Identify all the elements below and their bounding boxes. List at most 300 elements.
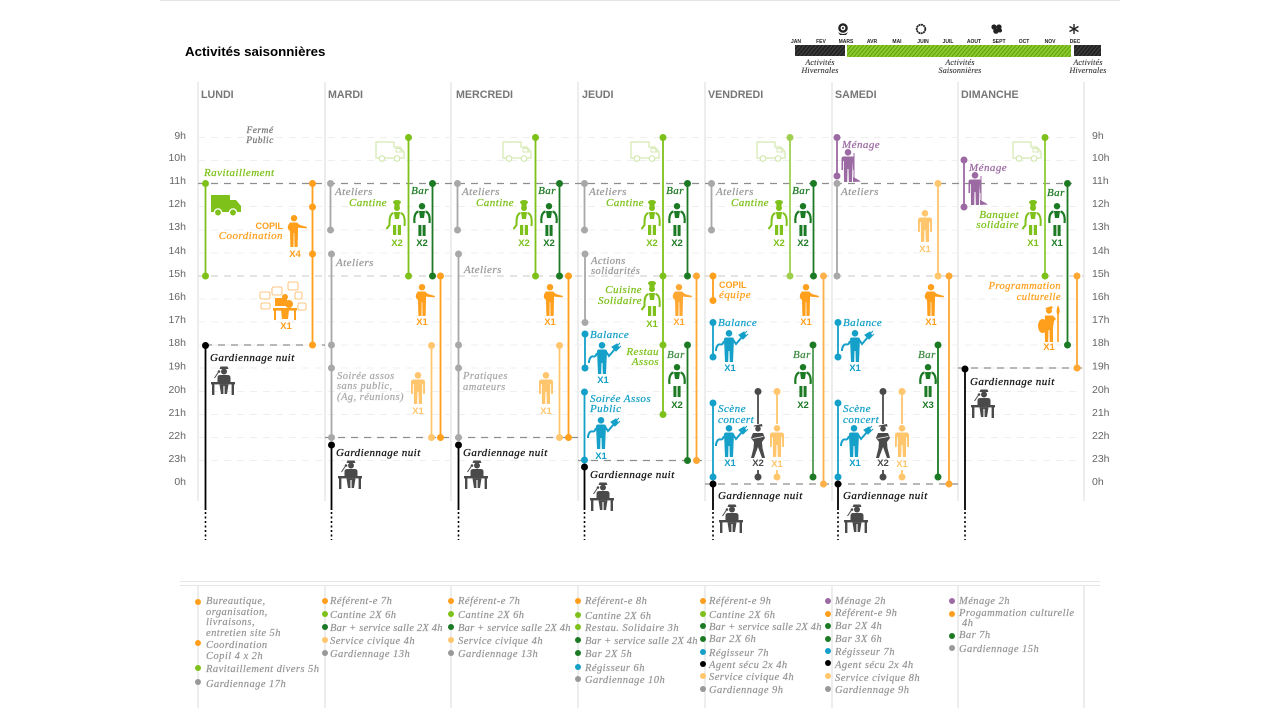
bar: service civique — [774, 388, 780, 480]
label: Bar — [667, 349, 685, 361]
label: copil: COPIL — [255, 221, 283, 231]
count: X2 — [752, 458, 764, 469]
month labels: DEC — [1070, 39, 1081, 45]
count: X2 — [671, 238, 683, 249]
hour labels right: 17h — [1092, 314, 1110, 326]
count: X1 — [849, 363, 862, 374]
label: culturelle — [1017, 292, 1061, 303]
hour labels left: 10h — [168, 152, 186, 164]
page frame line — [160, 0, 1120, 1]
bar: programmation — [1074, 273, 1080, 371]
count: X1 — [771, 459, 784, 470]
label: Cantine — [349, 197, 387, 209]
label: Ménage — [968, 162, 1007, 174]
icon: bar staff — [414, 203, 430, 236]
legend: dimanche — [949, 596, 1074, 655]
label: Ateliers — [463, 264, 502, 276]
bar: ateliers — [328, 180, 334, 233]
legend: vendredi — [700, 596, 822, 696]
icon: person pointing — [800, 284, 819, 316]
label: Balance — [843, 317, 882, 329]
label: solidaire — [976, 219, 1019, 231]
icon: civic service — [411, 372, 425, 404]
bar: ravitaillement — [202, 180, 208, 279]
label: Bar — [792, 185, 810, 197]
hour labels left: 22h — [168, 430, 186, 442]
legend: lundi: Gardiennage 17h — [206, 679, 286, 690]
hour labels right: 12h — [1092, 198, 1110, 210]
icon: technician — [588, 417, 620, 449]
bar: bar — [1064, 180, 1070, 348]
icon: bar staff — [920, 364, 936, 397]
count: X1 — [673, 317, 686, 328]
legend: jeudi: Restau. Solidaire 3h — [584, 623, 679, 634]
bar: ateliers — [834, 180, 840, 279]
label: winter 2: Hivernales — [1068, 66, 1107, 75]
icon: cleaner — [968, 172, 988, 205]
label: Cantine — [606, 197, 644, 209]
hour labels left: 17h — [168, 314, 186, 326]
legend: dimanche: Gardiennage 15h — [959, 644, 1039, 655]
label: Bar — [411, 185, 429, 197]
panel: samedi — [834, 134, 952, 540]
label: Bar — [1047, 187, 1065, 199]
legend: mercredi: Bar + service salle 2X 4h — [458, 623, 571, 634]
bar: gardiennage — [202, 342, 208, 540]
legend: samedi: Bar 2X 4h — [835, 621, 882, 632]
count: X1 — [544, 317, 557, 328]
legend: samedi — [825, 596, 920, 696]
label: Gardiennage nuit — [463, 447, 548, 459]
icon: cook — [1022, 200, 1041, 235]
label: winter: Activités — [804, 58, 835, 67]
icon: bar staff — [1049, 203, 1065, 236]
icon: guard at desk — [464, 460, 488, 489]
hour labels left: 19h — [168, 360, 186, 372]
label: season: Saisonnières — [938, 66, 982, 75]
bar: cantine — [787, 134, 793, 279]
bar: gardiennage — [835, 481, 841, 540]
label: Gardiennage nuit — [336, 447, 421, 459]
month labels: OCT — [1019, 39, 1029, 45]
hour labels right: 15h — [1092, 268, 1110, 280]
label: season: Activités — [944, 58, 975, 67]
legend: lundi: Bureautique, — [206, 596, 266, 607]
bar: sécurité — [755, 388, 761, 480]
legend: vendredi: Service civique 4h — [709, 672, 794, 683]
bar: ateliers — [708, 180, 714, 233]
icon: cook — [768, 200, 787, 235]
icon: cleaner — [842, 149, 861, 182]
legend: samedi: Ménage 2h — [834, 596, 886, 607]
bar: copil — [710, 273, 716, 304]
hour labels left: 0h — [174, 476, 186, 488]
hour labels right: 23h — [1092, 453, 1110, 465]
bar: balance — [710, 320, 716, 360]
count: X2 — [646, 238, 658, 249]
hour labels right: 18h — [1092, 337, 1110, 349]
label: coordination: Coordination — [219, 230, 283, 242]
label: Soirée Assos — [590, 393, 651, 405]
label: Ateliers — [334, 186, 373, 198]
legend: samedi: Régisseur 7h — [834, 647, 895, 658]
bar: balance — [835, 320, 841, 360]
icon: security agent — [876, 424, 890, 458]
hour labels left: 15h — [168, 268, 186, 280]
bar: bar 2 — [684, 342, 690, 464]
legend: vendredi: Gardiennage 9h — [709, 685, 783, 696]
count: X1 — [416, 317, 429, 328]
icon: technician — [589, 342, 621, 374]
count: X1 — [597, 375, 610, 386]
count: X1 — [412, 406, 425, 417]
bar: bar 2 — [810, 342, 816, 480]
bar: scène — [710, 400, 716, 480]
label: Actions — [590, 256, 626, 267]
label: Ateliers — [840, 186, 879, 198]
icon: technician — [842, 330, 874, 362]
label: copil: COPIL — [719, 280, 747, 290]
icon: guard at desk — [719, 504, 743, 533]
label: amateurs — [463, 382, 506, 393]
bar: référent — [438, 273, 444, 440]
hour labels left: 16h — [168, 291, 186, 303]
hour labels left: 14h — [168, 245, 186, 257]
legend: vendredi: Bar + service salle 2X 4h — [709, 622, 822, 633]
icon: faded truck — [1013, 142, 1041, 161]
legend: jeudi — [575, 596, 698, 686]
count: X3 — [922, 400, 934, 411]
legend: mardi: Bar + service salle 2X 4h — [330, 623, 443, 634]
bar: gardiennage — [710, 481, 716, 540]
bar: ménage — [834, 134, 840, 179]
label: Cantine — [476, 197, 514, 209]
icon: person pointing — [925, 284, 944, 316]
label: Gardiennage nuit — [970, 376, 1055, 388]
count: X1 — [1051, 238, 1064, 249]
bar: bar — [430, 180, 436, 279]
panel: mercredi — [454, 134, 572, 540]
count: X1 — [919, 244, 932, 255]
count: X1 — [724, 458, 737, 469]
month labels: JUIN — [917, 39, 929, 45]
hour labels right: 20h — [1092, 384, 1110, 396]
label: ravitaillement: Ravitaillement — [203, 167, 275, 179]
icon: guard at desk — [844, 504, 868, 533]
count: X1 — [896, 459, 909, 470]
season bar — [847, 45, 1071, 57]
count: X1 — [849, 458, 862, 469]
month labels — [791, 39, 1081, 45]
bar: ateliers — [454, 180, 460, 233]
legend: vendredi: Agent sécu 2x 4h — [708, 660, 788, 671]
day headings: VENDREDI — [708, 89, 763, 101]
label: gardiennage: Gardiennage nuit — [210, 352, 295, 364]
label: Bar — [538, 185, 556, 197]
hour labels right: 11h — [1092, 175, 1109, 187]
day headings — [201, 89, 1019, 101]
bar: référent — [820, 273, 826, 487]
bar: service civique — [935, 180, 941, 279]
label: soirée: sans public, — [337, 381, 393, 392]
label: Assos — [631, 356, 659, 368]
label: Bar — [918, 349, 936, 361]
legend divider — [180, 581, 1100, 586]
label: Ateliers — [335, 257, 374, 269]
icon: cook — [386, 200, 405, 235]
count: X1 — [724, 363, 737, 374]
legend: dimanche: Ménage 2h — [958, 596, 1010, 607]
legend: mercredi — [448, 596, 571, 660]
bar: gardiennage — [962, 366, 968, 540]
label: équipe: équipe — [719, 289, 751, 301]
label: Scène — [843, 403, 871, 415]
count: X2 — [797, 400, 809, 411]
legend: jeudi: Bar 2X 5h — [585, 649, 632, 660]
count: X1 — [1043, 342, 1056, 353]
hour labels right: 21h — [1092, 407, 1110, 419]
hour labels right: 9h — [1092, 130, 1104, 142]
label: Bar — [793, 349, 811, 361]
legend: lundi: Copil 4 x 2h — [206, 651, 263, 662]
label: soirée: (Ag, réunions) — [337, 392, 404, 403]
label: Pratiques — [462, 371, 508, 382]
count: X4 — [289, 249, 302, 260]
legend: mardi: Service civique 4h — [330, 636, 415, 647]
label: Restau — [625, 346, 659, 358]
hour labels left: 12h — [168, 198, 186, 210]
icon: faded truck — [757, 142, 785, 161]
legend: lundi: entretien site 5h — [206, 628, 281, 639]
icon: faded truck — [503, 142, 531, 161]
label: Ateliers — [715, 186, 754, 198]
month labels: AVR — [867, 39, 877, 45]
legend: dimanche: 4h — [962, 618, 973, 629]
hour labels left: 23h — [168, 453, 186, 465]
day headings: MERCREDI — [456, 89, 513, 101]
panel: jeudi — [582, 134, 700, 540]
icon: person pointing — [544, 284, 563, 316]
label: concert — [718, 414, 755, 426]
legend: mardi — [322, 596, 443, 660]
icon: bar staff — [795, 364, 811, 397]
icon: flower — [838, 24, 848, 35]
icon: security agent — [751, 424, 765, 458]
legend: jeudi: Référent-e 8h — [584, 596, 647, 607]
legend: jeudi: Régisseur 6h — [584, 663, 645, 674]
legend: lundi: Ravitaillement divers 5h — [205, 664, 319, 675]
legend: mercredi: Service civique 4h — [458, 636, 543, 647]
hour labels right — [1092, 130, 1110, 488]
icon: bar staff — [795, 203, 811, 236]
label: Ateliers — [461, 186, 500, 198]
hour labels right: 10h — [1092, 152, 1110, 164]
label: soirée: Soirée assos — [337, 371, 395, 382]
closed note: Fermé — [245, 126, 274, 136]
winter bar left — [795, 45, 845, 56]
count: X2 — [543, 238, 555, 249]
month labels: MARS — [839, 39, 854, 45]
bar: actions — [582, 251, 588, 326]
icon: guard at desk — [211, 366, 235, 395]
label: Public — [589, 403, 621, 415]
bar: service civique — [556, 342, 562, 440]
month labels: JUIL — [943, 39, 953, 45]
label: concert — [843, 414, 880, 426]
icon: cook — [514, 200, 532, 235]
label: Cuisine — [605, 284, 642, 296]
count: X2 — [518, 238, 530, 249]
icon: guard at desk — [338, 460, 362, 489]
hour grid — [198, 138, 1084, 460]
label: winter 2: Activités — [1072, 58, 1103, 67]
legend: samedi: Service civique 8h — [835, 673, 920, 684]
count: X1 — [925, 317, 938, 328]
label: Scène — [718, 403, 746, 415]
month labels: MAI — [892, 39, 902, 45]
icon: bar staff — [541, 203, 557, 236]
hour labels left: 11h — [169, 175, 186, 187]
day headings: JEUDI — [582, 89, 614, 101]
icon: snowflake — [1070, 24, 1078, 34]
count: X1 — [646, 319, 659, 330]
bar: service civique — [899, 388, 905, 480]
legend: samedi: Gardiennage 9h — [835, 685, 909, 696]
icon: bar staff — [669, 364, 685, 397]
icon: truck — [211, 195, 241, 216]
icon: technician — [716, 425, 748, 457]
panel: lundi — [202, 126, 316, 540]
day headings: MARDI — [328, 89, 363, 101]
legend: lundi: organisation, — [206, 607, 268, 618]
icon: sun — [917, 25, 925, 33]
legend: jeudi: Gardiennage 10h — [585, 675, 665, 686]
label: Balance — [718, 317, 757, 329]
label: Ateliers — [588, 186, 627, 198]
label: Gardiennage nuit — [718, 490, 803, 502]
icon: civic service — [770, 425, 784, 457]
seasonal timeline legend — [791, 24, 1107, 75]
legend: lundi — [195, 596, 319, 690]
column lines — [198, 82, 1084, 708]
bar: gardiennage — [456, 442, 462, 540]
count: X2 — [416, 238, 428, 249]
month labels: SEPT — [992, 39, 1006, 45]
hour labels left: 13h — [168, 221, 186, 233]
icon: technician — [716, 330, 748, 362]
legend: mardi: Référent-e 7h — [329, 596, 392, 607]
count: X2 — [773, 238, 785, 249]
icon: bar staff — [669, 203, 685, 236]
bar: cantine — [406, 134, 412, 279]
legend: mercredi: Gardiennage 13h — [458, 649, 538, 660]
label: Cantine — [731, 197, 769, 209]
icon: faded truck — [376, 142, 404, 161]
month labels: FEV — [816, 39, 827, 45]
legend: vendredi: Régisseur 7h — [708, 648, 769, 659]
day headings: DIMANCHE — [961, 89, 1019, 101]
hour labels left: 9h — [174, 130, 186, 142]
month labels: JAN — [791, 39, 801, 45]
icon: cook — [642, 200, 660, 235]
hour labels right: 22h — [1092, 430, 1110, 442]
count: X2 — [671, 400, 683, 411]
legend: vendredi: Bar 2X 6h — [709, 634, 756, 645]
count: X1 — [1027, 238, 1040, 249]
icon: artist — [1038, 305, 1060, 342]
bar: balance — [582, 331, 588, 371]
icon: civic service — [918, 210, 932, 242]
bar: service civique — [428, 342, 434, 440]
legend: lundi: livraisons, — [206, 617, 255, 628]
day headings: SAMEDI — [835, 89, 877, 101]
icon: faded truck — [631, 142, 659, 161]
bar: sécurité — [880, 388, 886, 480]
legend: jeudi: Cantine 2X 6h — [585, 611, 652, 622]
bar: ateliers 2 — [328, 251, 334, 440]
bar: gardiennage — [582, 464, 588, 540]
icon: cook — [642, 281, 660, 316]
bar: cantine — [660, 134, 666, 418]
count: X2 — [797, 238, 809, 249]
hour labels left: 18h — [168, 337, 186, 349]
legend: mercredi: Référent-e 7h — [457, 596, 520, 607]
bar: référent — [694, 273, 700, 464]
legend: mardi: Cantine 2X 6h — [330, 610, 397, 621]
icon: guard at desk — [590, 482, 614, 511]
hour labels right: 19h — [1092, 360, 1110, 372]
bar: bar — [684, 180, 690, 279]
hour labels left: 20h — [168, 384, 186, 396]
bar: soirée — [582, 389, 588, 463]
bar: référent — [946, 273, 952, 487]
panel: vendredi — [708, 134, 826, 540]
legend: mardi: Gardiennage 13h — [330, 649, 410, 660]
month labels: NOV — [1045, 39, 1056, 45]
icon: civic service — [539, 372, 553, 404]
hour labels right: 14h — [1092, 245, 1110, 257]
label: Gardiennage nuit — [843, 490, 928, 502]
bar: bar — [935, 342, 941, 480]
bar: scène — [835, 400, 841, 480]
legend: jeudi: Bar + service salle 2X 4h — [585, 636, 698, 647]
winter bar right — [1074, 45, 1101, 56]
count: X1 — [595, 451, 608, 462]
bar: banquet — [1042, 134, 1048, 279]
label: Bar — [666, 185, 684, 197]
legend: dimanche: Bar 7h — [959, 630, 991, 641]
icon: technician — [841, 425, 873, 457]
legend: vendredi: Référent-e 9h — [708, 596, 771, 607]
hour labels left — [168, 130, 186, 488]
label: Ménage — [841, 139, 880, 151]
legend: samedi: Référent-e 9h — [834, 608, 897, 619]
hour labels right: 16h — [1092, 291, 1110, 303]
closed note: Public — [245, 136, 274, 146]
icon: person pointing — [416, 284, 435, 316]
icon: clover — [991, 24, 1002, 34]
bar: cantine — [532, 134, 538, 279]
label: Banquet — [979, 209, 1019, 221]
icon: civic service — [895, 425, 909, 457]
bar: ménage — [961, 157, 967, 210]
legend: lundi: Coordination — [206, 640, 268, 651]
count: X1 — [280, 321, 293, 332]
count: X1 — [540, 406, 553, 417]
label: Solidaire — [598, 295, 642, 307]
legend: mercredi: Cantine 2X 6h — [458, 610, 525, 621]
day headings: LUNDI — [201, 89, 234, 101]
